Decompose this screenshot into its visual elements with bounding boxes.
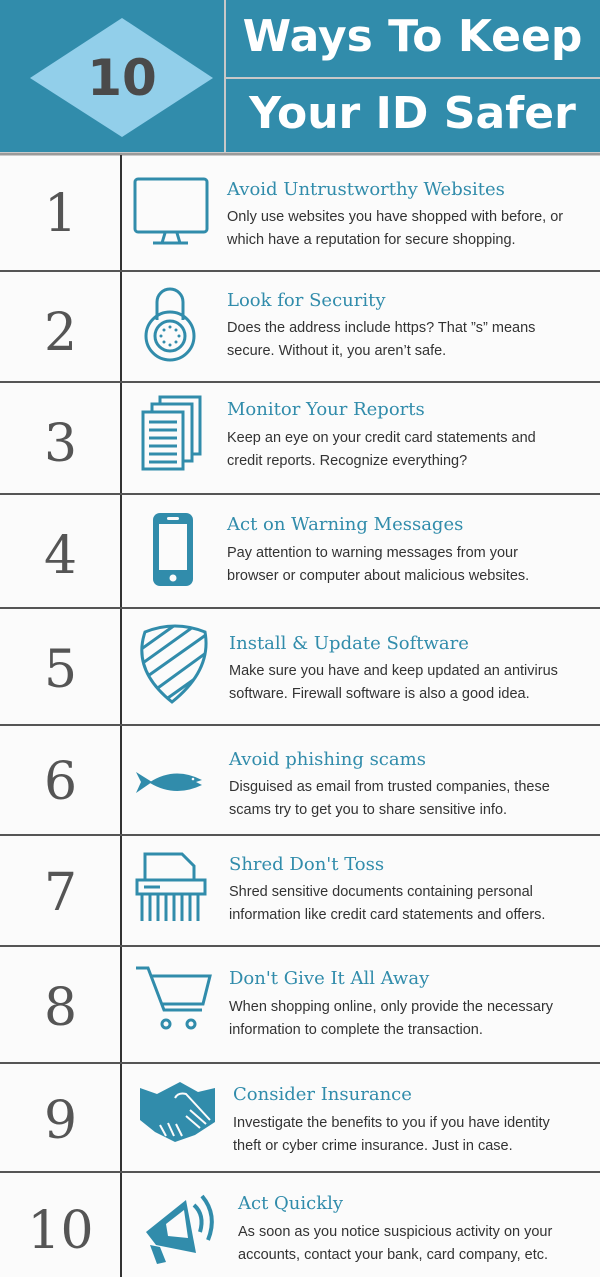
icon: shield — [140, 622, 210, 702]
body: As soon as you notice suspicious activity on your — [238, 1224, 552, 1240]
body: Does the address include https? That ”s” means — [227, 320, 535, 336]
icon: documents — [143, 397, 200, 469]
body: Pay attention to warning messages from your — [227, 545, 518, 561]
number 2: 2 — [44, 303, 77, 363]
title: Monitor Your Reports — [227, 399, 425, 420]
body: Disguised as email from trusted companies, these — [229, 779, 550, 795]
title: Consider Insurance — [233, 1084, 412, 1105]
title: Install & Update Software — [229, 633, 469, 654]
body — [233, 1115, 550, 1154]
body: Only use websites you have shopped with before, or — [227, 209, 563, 225]
body: theft or cyber crime insurance. Just in case. — [233, 1138, 513, 1154]
title: Shred Don't Toss — [229, 854, 384, 875]
icon: megaphone — [146, 1196, 212, 1264]
number 10: 10 — [27, 1201, 94, 1261]
body: which have a reputation for secure shopping. — [227, 232, 516, 248]
body: secure. Without it, you aren’t safe. — [227, 343, 446, 359]
title: Avoid Untrustworthy Websites — [227, 179, 505, 200]
body — [227, 545, 529, 584]
body — [229, 884, 545, 923]
number 4: 4 — [44, 526, 77, 586]
row 10 — [27, 1193, 552, 1263]
body — [227, 430, 536, 469]
icon: shredder — [137, 854, 205, 921]
icon: handshake — [140, 1082, 215, 1142]
row 7 — [44, 854, 545, 923]
body: accounts, contact your bank, card company, etc. — [238, 1247, 548, 1263]
body: Shred sensitive documents containing personal — [229, 884, 533, 900]
number 1: 1 — [44, 184, 77, 244]
body — [238, 1224, 552, 1263]
row 6 — [44, 749, 550, 818]
row 9 — [44, 1084, 550, 1154]
body: credit reports. Recognize everything? — [227, 453, 467, 469]
body: scams try to get you to share sensitive info. — [229, 802, 507, 818]
icon: monitor — [135, 179, 207, 243]
title: Act Quickly — [238, 1193, 343, 1214]
body: Investigate the benefits to you if you have identity — [233, 1115, 550, 1131]
number 8: 8 — [44, 978, 77, 1038]
body — [229, 663, 558, 702]
body — [229, 779, 550, 818]
title: Don't Give It All Away — [229, 968, 429, 989]
title: Look for Security — [227, 290, 386, 311]
title: Act on Warning Messages — [227, 514, 463, 535]
header banner — [0, 0, 600, 152]
header decoration: diamond with 10: 10 — [87, 49, 157, 107]
body: information to complete the transaction. — [229, 1022, 483, 1038]
header decoration: diamond with 10 — [30, 18, 213, 137]
title line 2: Your ID Safer — [249, 88, 576, 139]
number 3: 3 — [44, 414, 77, 474]
body: browser or computer about malicious websites. — [227, 568, 529, 584]
number 9: 9 — [44, 1091, 77, 1151]
row 5 — [44, 633, 558, 702]
icon: fish — [136, 772, 202, 793]
number 5: 5 — [44, 640, 77, 700]
icon: shopping cart — [136, 968, 210, 1028]
number 7: 7 — [44, 863, 77, 923]
title line 1: Ways To Keep — [243, 11, 582, 62]
body — [227, 320, 535, 359]
body: software. Firewall software is also a good idea. — [229, 686, 530, 702]
body — [227, 209, 563, 248]
icon: smartphone — [153, 513, 193, 586]
row 4 — [44, 514, 529, 586]
number 6: 6 — [44, 752, 77, 812]
row 8 — [44, 968, 553, 1038]
title: Avoid phishing scams — [229, 749, 426, 770]
icon: padlock — [146, 289, 194, 360]
row 3 — [44, 399, 536, 474]
body: information like credit card statements and offers. — [229, 907, 545, 923]
body: Make sure you have and keep updated an antivirus — [229, 663, 558, 679]
row 1 — [44, 179, 563, 248]
body — [229, 999, 553, 1038]
body: Keep an eye on your credit card statements and — [227, 430, 536, 446]
row 2 — [44, 290, 535, 363]
body: When shopping online, only provide the necessary — [229, 999, 553, 1015]
